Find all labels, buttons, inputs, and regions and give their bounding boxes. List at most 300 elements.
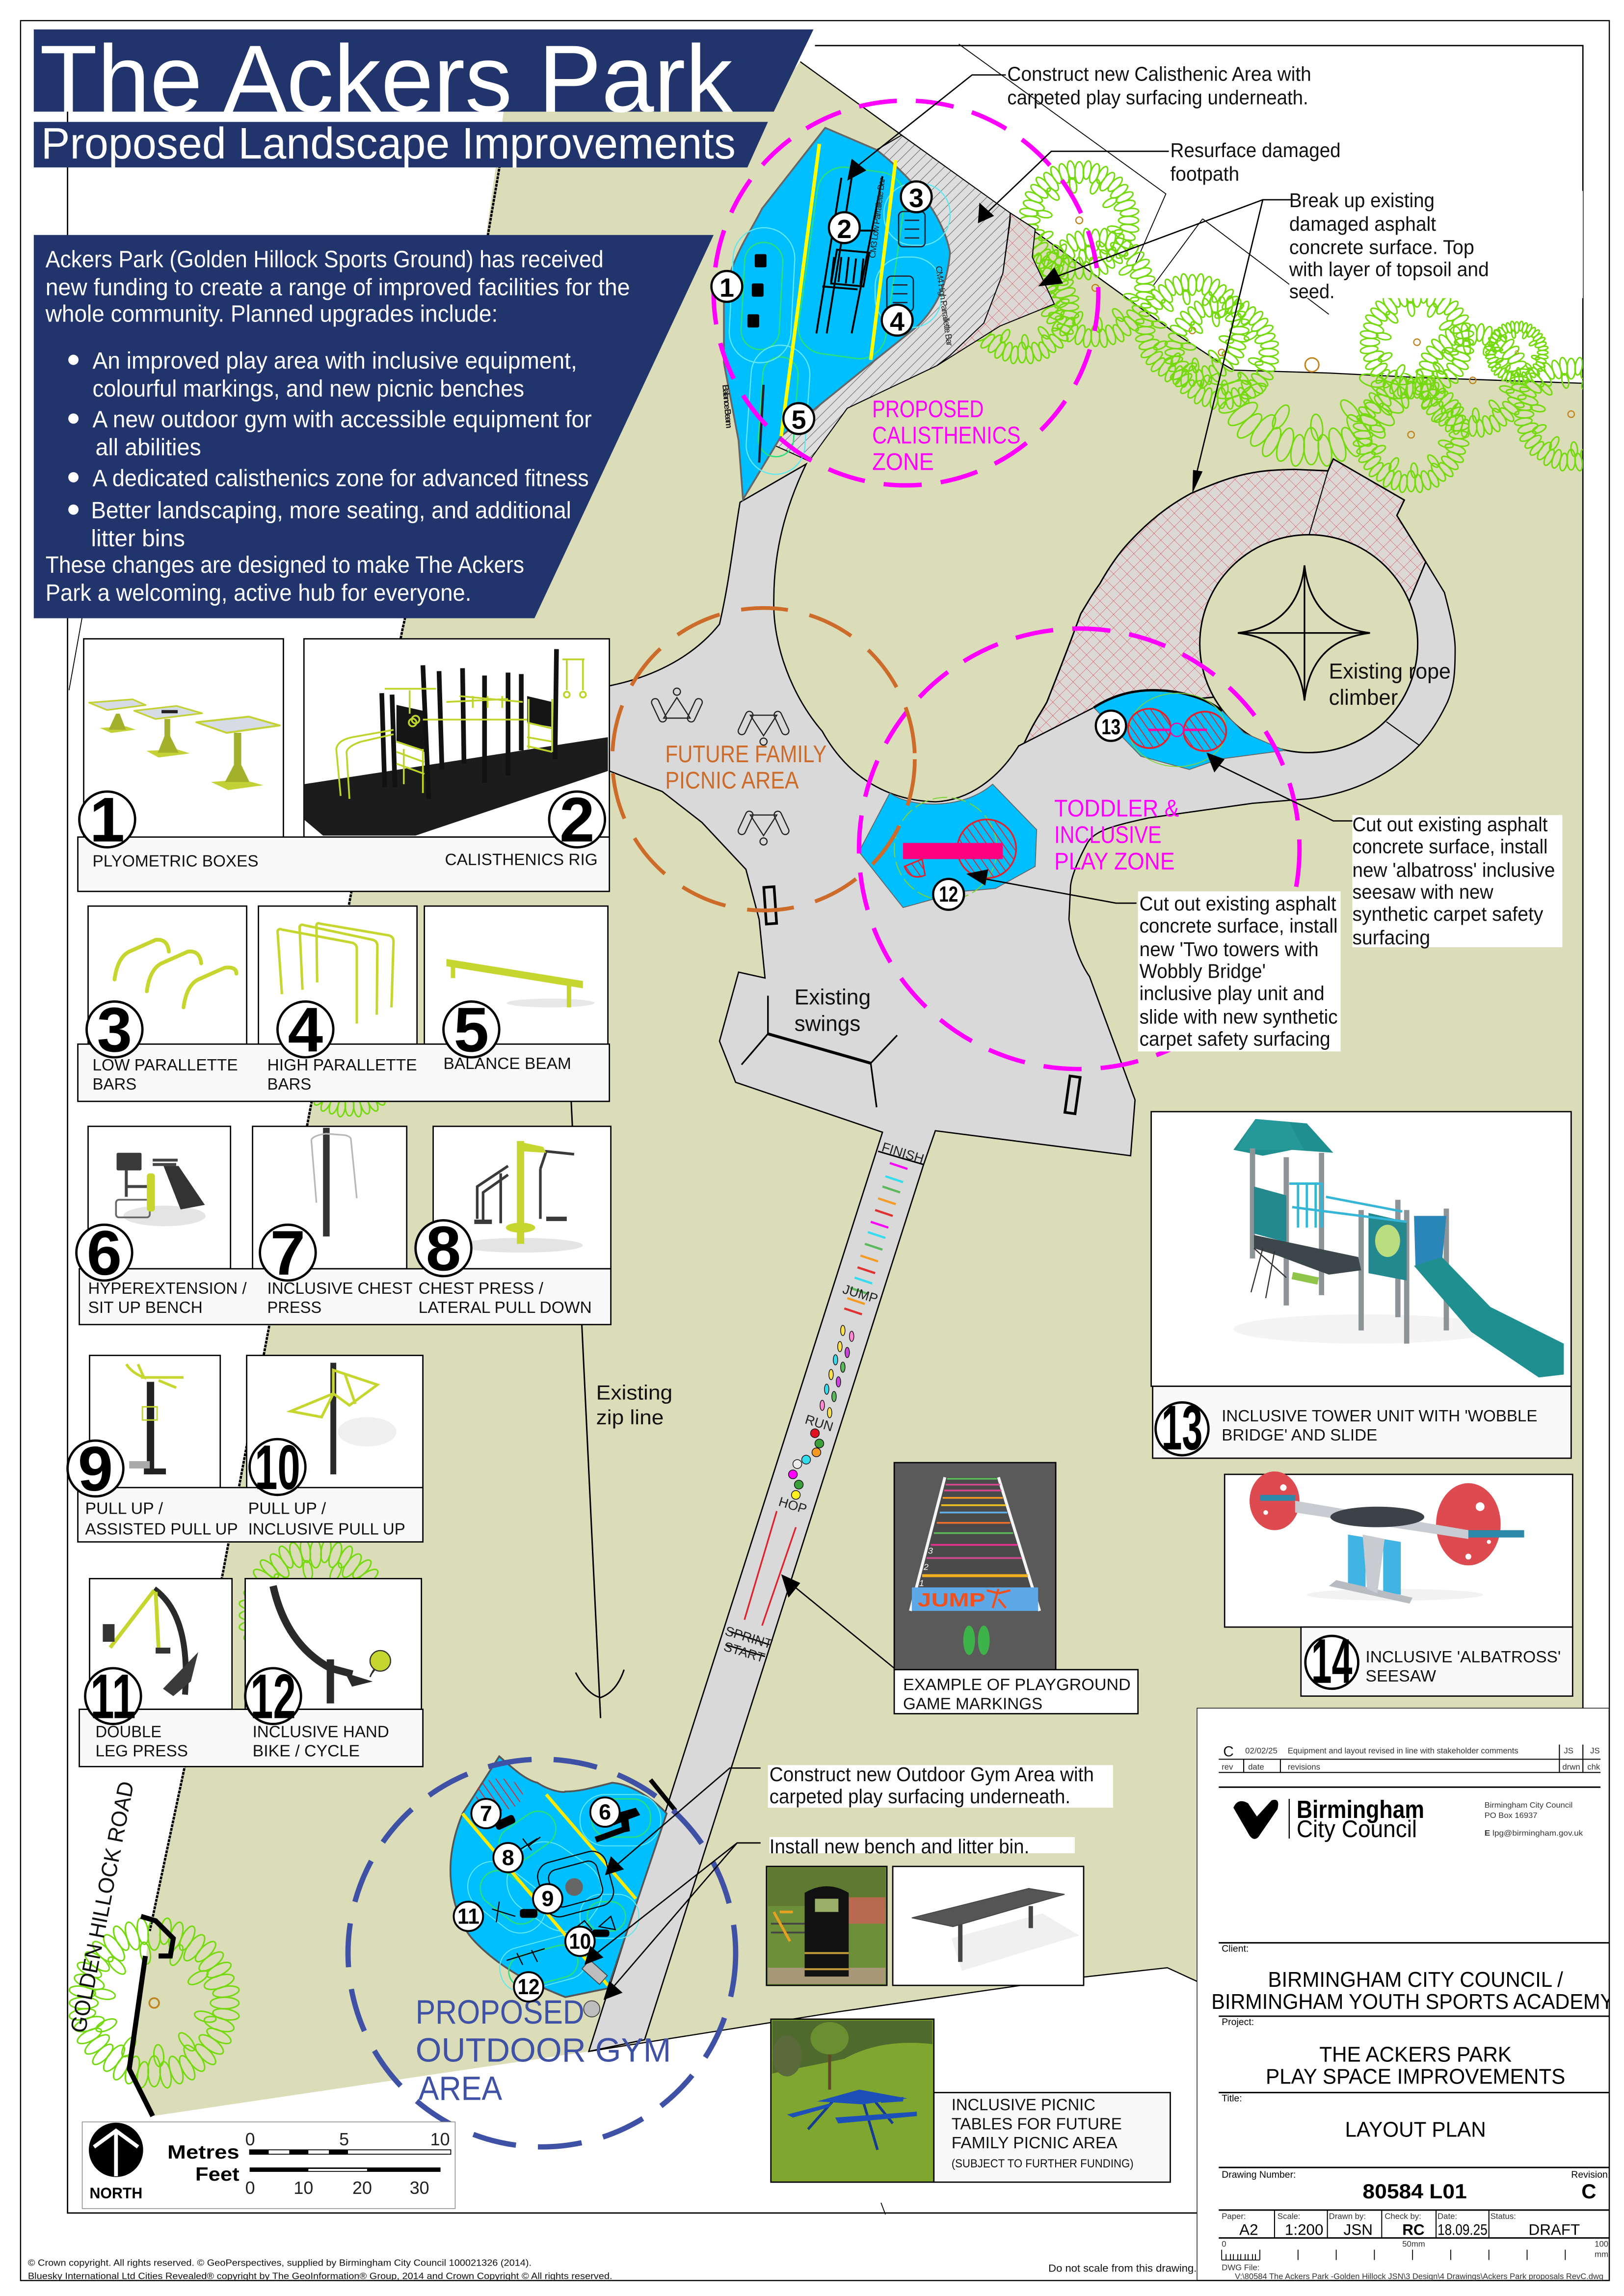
zone circle: outdoor gym: [348, 1759, 736, 2147]
number badge 7: [260, 1218, 316, 1288]
gym equipment plan symbols: [494, 1808, 640, 1937]
equipment small labels: CM4 High Parrallette Bar: [934, 265, 955, 347]
drawing file path: [1222, 2265, 1603, 2280]
scale bar: metres and feet: 10: [293, 2178, 313, 2198]
map number markers: calisthenics: 1: [719, 273, 734, 302]
icon: calisthenics rig plan: [816, 176, 882, 333]
toddler play surfacing 12: [859, 784, 1037, 908]
big tree trunk marker: [1305, 358, 1319, 372]
drawing data cells: Drawn by:: [1329, 2212, 1366, 2221]
callout: albatross seesaw: new 'albatross' inclusive: [1353, 858, 1555, 881]
caption: picnic tables: [934, 2093, 1171, 2182]
caption: picnic tables: TABLES FOR FUTURE: [952, 2114, 1122, 2133]
image: playground game markings: 1: [919, 1578, 924, 1588]
map number markers: gym: 8: [502, 1845, 514, 1870]
track labels: [722, 1140, 926, 1665]
scale bar: metres and feet: 20: [352, 2178, 372, 2198]
label: existing swings: Existing: [795, 985, 871, 1010]
caption: equipment 3 to 5: [78, 1044, 610, 1101]
client details: Drawing Number:: [1222, 2169, 1296, 2180]
drawing file path: DWG File:: [1222, 2263, 1259, 2272]
map number markers: calisthenics: 5: [792, 405, 806, 435]
callout: calisthenic area: [1007, 63, 1311, 109]
revision table: rev: [1222, 1762, 1233, 1771]
icon: rope climber: [1238, 565, 1370, 700]
caption: equipment 11 and 12: LEG PRESS: [95, 1741, 188, 1760]
revision table: drwn: [1562, 1762, 1580, 1771]
arrowheads: [585, 159, 1225, 2000]
number badge 4: [277, 995, 333, 1065]
caption: inclusive seesaw: SEESAW: [1365, 1667, 1436, 1685]
label: existing rope climber: climber: [1329, 685, 1398, 710]
road name: GOLDEN HILLOCK ROAD: [65, 1779, 139, 2035]
callout: two towers play unit: new 'Two towers with: [1140, 938, 1319, 961]
callout: two towers play unit: Cut out existing asphalt: [1140, 892, 1336, 915]
image: calisthenics rig: [304, 639, 610, 837]
caption: equipment 6 to 8: INCLUSIVE CHEST: [267, 1279, 413, 1297]
callout: two towers play unit: slide with new synthetic: [1140, 1005, 1338, 1028]
picnic table symbols: [650, 688, 790, 845]
map number markers: gym: 10: [569, 1928, 591, 1953]
caption: equipment 9 and 10: ASSISTED PULL UP: [85, 1520, 238, 1538]
image: high parallette bars: [259, 906, 417, 1044]
equipment small labels: Balance Beam: [720, 384, 734, 429]
icon: parallette bars plan: [887, 212, 925, 311]
number badge 13: [1156, 1393, 1208, 1463]
track labels: START: [722, 1639, 767, 1665]
logo: Birmingham City Council: City Council: [1297, 1815, 1417, 1842]
scale bar: metres and feet: 30: [410, 2178, 429, 2198]
ruler: mm: [1595, 2250, 1608, 2259]
map number markers: gym: [453, 1797, 620, 2002]
scale bar: metres and feet: Feet: [195, 2164, 240, 2185]
panel: introduction text: A new outdoor gym with accessible equipment for: [92, 407, 592, 433]
callout: break up surface: concrete surface. Top: [1289, 236, 1474, 259]
title block: [1197, 1708, 1614, 2281]
number badge 5: 5: [454, 995, 489, 1065]
number badge 6: 6: [87, 1218, 122, 1288]
footprints: [820, 1325, 854, 1418]
number badge 6: [77, 1218, 132, 1288]
new bench on gym area: [650, 1780, 675, 1811]
icon: seesaw plan: [1128, 709, 1171, 748]
drawing data cells: Date:: [1438, 2212, 1457, 2221]
callout: resurface footpath: [1171, 139, 1341, 185]
panel: introduction text: Park a welcoming, active hub for everyone.: [46, 580, 471, 606]
callout: calisthenic area: carpeted play surfacing underneath.: [1007, 86, 1308, 109]
panel: equipment 3 to 5: [78, 906, 610, 1101]
revision table: date: [1248, 1762, 1264, 1771]
image: playground game markings: 3: [928, 1546, 933, 1556]
zone label: picnic: [665, 741, 826, 794]
panel: introduction text: A dedicated calisthenics zone for advanced fitness: [92, 465, 589, 491]
image: double leg press: [90, 1578, 232, 1709]
client details: 80584 L01: [1362, 2180, 1467, 2203]
callout: break up surface: seed.: [1289, 280, 1335, 302]
callout: albatross seesaw: [1353, 813, 1562, 949]
ruler: 100: [1595, 2240, 1608, 2249]
gym yellow bay lines: [462, 1794, 636, 1985]
caption: equipment 1 and 2: [78, 837, 610, 891]
image: low parallette bars: [88, 906, 247, 1044]
hop circles: [789, 1429, 824, 1499]
drawing data cells: JSN: [1344, 2221, 1373, 2239]
panel: introduction text: These changes are designed to make The Ackers: [46, 552, 524, 578]
calisthenics zone surfacing: [720, 128, 1054, 499]
revision table: Equipment and layout revised in line with stakeholder comments: [1288, 1746, 1518, 1755]
track labels: FINISH: [880, 1140, 926, 1166]
drawing data cells: Paper:: [1222, 2212, 1246, 2221]
outdoor gym surfacing: [451, 1756, 675, 2017]
seesaw surfacing 13: [1094, 690, 1285, 770]
label: existing zip line: Existing: [596, 1381, 672, 1404]
caption: equipment 11 and 12: INCLUSIVE HAND: [253, 1722, 389, 1740]
image: albatross seesaw: [1225, 1471, 1572, 1627]
image: litter bin photo: [767, 1867, 887, 1985]
number badge 11: 11: [90, 1662, 136, 1732]
number badge 5: [444, 995, 499, 1065]
zone label: toddler: [1054, 795, 1179, 875]
number badge 2: 2: [559, 785, 595, 855]
client details: Project:: [1222, 2017, 1254, 2028]
callout: break up surface: Break up existing: [1289, 189, 1435, 212]
callout arrows: [593, 75, 1355, 1990]
callout: albatross seesaw: synthetic carpet safety: [1353, 903, 1544, 925]
number badge 1: 1: [90, 785, 125, 855]
panel: game markings example: [894, 1463, 1138, 1714]
callout: break up surface: [1289, 189, 1489, 302]
caption: inclusive seesaw: [1301, 1627, 1572, 1696]
existing swings frame: [742, 996, 897, 1107]
sprint lanes: [745, 1511, 796, 1626]
copyright notes: Bluesky International Ltd Cities Revealed® copyright by The GeoInformation® Group, 2014 and Crown Copyright © All rights reserved.: [28, 2270, 612, 2281]
number badge 4: 4: [288, 995, 323, 1065]
number badge 10: 10: [255, 1433, 300, 1503]
caption: equipment 9 and 10: PULL UP /: [85, 1499, 163, 1518]
caption: equipment 6 to 8: CHEST PRESS /: [419, 1279, 544, 1297]
zone circle: picnic area: [612, 608, 915, 910]
balance beam plan: [759, 385, 764, 463]
council address: Birmingham City Council: [1485, 1801, 1572, 1810]
drawing data cells: A2: [1239, 2221, 1258, 2239]
image: pull up inclusive: [247, 1356, 423, 1489]
zone label: calisthenics: [872, 396, 1020, 476]
label: existing swings: [795, 985, 871, 1036]
drawing data cells: 18.09.25: [1438, 2221, 1488, 2239]
main footpath and sprint track: [589, 464, 1455, 2052]
icon: plyometric boxes: [747, 254, 767, 327]
map number markers: play: 13: [1101, 714, 1120, 739]
scale bar: metres and feet: [167, 2130, 451, 2198]
callout: calisthenic area: Construct new Calisthenic Area with: [1007, 63, 1311, 85]
caption: inclusive tower unit: BRIDGE' AND SLIDE: [1222, 1426, 1377, 1444]
map number markers: play: [933, 711, 1126, 910]
map number markers: calisthenics: 4: [890, 307, 905, 336]
zone label: picnic: PICNIC AREA: [665, 767, 799, 794]
number badge 3: 3: [97, 995, 132, 1065]
panel: introduction text: all abilities: [95, 435, 201, 461]
caption: equipment 9 and 10: INCLUSIVE PULL UP: [248, 1520, 405, 1538]
number badge 10: [250, 1433, 305, 1503]
client details: BIRMINGHAM CITY COUNCIL /: [1268, 1968, 1564, 1992]
zone label: outdoor gym: OUTDOOR GYM: [416, 2031, 671, 2069]
scale bar: metres and feet: Metres: [167, 2142, 240, 2163]
track labels: RUN: [803, 1412, 835, 1434]
image: pull up assisted: [90, 1356, 220, 1488]
ruler: [1222, 2240, 1608, 2260]
revision table: chk: [1587, 1762, 1600, 1771]
equipment small labels: CM3 Low Parrallette Bar: [867, 177, 887, 259]
client details: PLAY SPACE IMPROVEMENTS: [1266, 2065, 1565, 2089]
map number markers: calisthenics: 2: [837, 214, 852, 244]
copyright notes: [28, 2258, 612, 2281]
title banner: The Ackers Park: [40, 26, 733, 132]
icon: play tower plan: [958, 820, 1016, 878]
number badge 14: 14: [1311, 1627, 1353, 1697]
drawing data cells: Scale:: [1278, 2212, 1300, 2221]
label: existing rope climber: Existing rope: [1329, 658, 1451, 683]
number badge 3: [87, 995, 142, 1065]
image: playground game markings: [894, 1463, 1056, 1670]
number badge 13: 13: [1162, 1393, 1202, 1463]
number badge 12: [245, 1662, 301, 1732]
caption: equipment 3 to 5: HIGH PARALLETTE: [267, 1056, 417, 1074]
scale note: Do not scale from this drawing.: [1048, 2263, 1197, 2274]
image: chest press lateral pull: [433, 1126, 611, 1269]
caption: game markings: [894, 1670, 1138, 1714]
caption: equipment 1 and 2: PLYOMETRIC BOXES: [92, 852, 259, 870]
caption: game markings: GAME MARKINGS: [903, 1695, 1042, 1713]
caption: equipment 3 to 5: BARS: [92, 1075, 136, 1093]
logo: Birmingham City Council: Birmingham: [1297, 1795, 1424, 1823]
revision table: [1219, 1743, 1600, 1787]
caption: picnic tables: FAMILY PICNIC AREA: [952, 2134, 1118, 2152]
label: existing zip line: [596, 1381, 672, 1429]
caption: inclusive tower unit: INCLUSIVE TOWER UNIT WITH 'WOBBLE: [1222, 1407, 1537, 1425]
panel: equipment 9 and 10: [68, 1356, 423, 1542]
callout: break up surface: with layer of topsoil and: [1289, 258, 1489, 281]
callout: albatross seesaw: surfacing: [1353, 926, 1430, 949]
track labels: HOP: [777, 1494, 809, 1517]
callout: two towers play unit: inclusive play unit and: [1140, 982, 1325, 1005]
image: balance beam: [425, 906, 608, 1044]
caption: equipment 6 to 8: SIT UP BENCH: [88, 1298, 203, 1316]
number badge 8: 8: [426, 1214, 461, 1284]
caption: inclusive seesaw: INCLUSIVE 'ALBATROSS': [1365, 1648, 1561, 1666]
callout: outdoor gym area: Construct new Outdoor Gym Area with: [770, 1763, 1094, 1786]
panel: introduction text: Better landscaping, more seating, and additional: [91, 498, 571, 524]
callout: resurface footpath: Resurface damaged: [1171, 139, 1341, 161]
panel: introduction text: whole community. Planned upgrades include:: [45, 301, 498, 327]
number badge 12: 12: [250, 1662, 296, 1732]
scale bar: metres and feet: 0: [245, 2130, 255, 2149]
council address: E lpg@birmingham.gov.uk: [1485, 1829, 1583, 1838]
panel: introduction text: new funding to create a range of improved facilities for the: [46, 274, 630, 300]
map number markers: play: 12: [939, 881, 958, 907]
revision table: C: [1223, 1743, 1234, 1760]
map number markers: gym: 7: [480, 1801, 492, 1826]
zone label: calisthenics: ZONE: [872, 449, 934, 476]
icon: north arrow: NORTH: [90, 2185, 142, 2202]
callout: two towers play unit: concrete surface, install: [1140, 914, 1338, 937]
panel: inclusive tower unit: [1151, 1112, 1571, 1463]
equipment small labels: [720, 177, 955, 429]
client details: BIRMINGHAM YOUTH SPORTS ACADEMY: [1211, 1990, 1614, 2014]
number badge 8: [416, 1214, 471, 1284]
caption: equipment 3 to 5: BARS: [267, 1075, 311, 1093]
image: playground game markings: 2: [923, 1562, 929, 1572]
drawing data cells: Check by:: [1384, 2212, 1421, 2221]
client details: THE ACKERS PARK: [1319, 2043, 1512, 2067]
number badge 14: [1305, 1627, 1358, 1697]
panel: introduction text: Ackers Park (Golden Hillock Sports Ground) has received: [46, 247, 604, 273]
client details: C: [1581, 2180, 1596, 2203]
jump bars: [844, 1163, 907, 1314]
zone label: toddler: TODDLER &: [1054, 795, 1179, 822]
drawing data cells: 1:200: [1285, 2221, 1323, 2239]
zone label: calisthenics: CALISTHENICS: [872, 422, 1020, 449]
callout: albatross seesaw: Cut out existing asphalt: [1353, 813, 1547, 836]
callout: bench and litter bin: Install new bench and litter bin.: [770, 1835, 1029, 1858]
client details: Title:: [1222, 2093, 1242, 2104]
client details: LAYOUT PLAN: [1345, 2118, 1486, 2141]
client details: [1211, 1943, 1614, 2238]
image: picnic table photo: [771, 2019, 934, 2182]
panel: equipment 11 and 12: [80, 1578, 423, 1766]
map number markers: gym: 11: [457, 1903, 479, 1928]
image: plyometric boxes: [84, 639, 283, 838]
callout: albatross seesaw: concrete surface, install: [1353, 835, 1547, 857]
callout: albatross seesaw: seesaw with new: [1353, 881, 1494, 903]
panel: introduction text: colourful markings, and new picnic benches: [92, 376, 524, 402]
surfacing zones: [740, 164, 908, 458]
zone circle: calisthenics: [714, 101, 1098, 485]
callout: resurface footpath: footpath: [1171, 162, 1239, 185]
subtitle banner: Proposed Landscape Improvements: [41, 119, 736, 168]
drawing data cells: DRAFT: [1529, 2221, 1580, 2239]
label: existing zip line: zip line: [596, 1406, 664, 1429]
white box behind topsoil note: [1289, 191, 1583, 298]
ruler: 50mm: [1402, 2240, 1425, 2249]
revision table: 02/02/25: [1245, 1746, 1278, 1755]
zone label: toddler: PLAY ZONE: [1054, 848, 1174, 875]
caption: picnic tables: INCLUSIVE PICNIC: [952, 2095, 1095, 2113]
number badge 9: [68, 1434, 123, 1504]
number badge 1: [80, 785, 135, 855]
inner lawn of rope climber: [1200, 534, 1418, 752]
council address: [1485, 1801, 1583, 1838]
panel: introduction text: An improved play area with inclusive equipment,: [92, 348, 577, 374]
image: new bench: [893, 1867, 1084, 1985]
panel: north arrow and scale bar: [82, 2122, 455, 2209]
yellow bay lines: [781, 144, 896, 436]
zone label: calisthenics: PROPOSED: [872, 396, 984, 423]
revision table: revisions: [1288, 1762, 1320, 1771]
caption: equipment 9 and 10: PULL UP /: [248, 1499, 326, 1518]
copyright notes: © Crown copyright. All rights reserved. © GeoPerspectives, supplied by Birmingham City Council 100021326 (2014).: [28, 2258, 532, 2268]
callout: two towers play unit: carpet safety surfacing: [1140, 1027, 1331, 1050]
icon: north arrow: [89, 2123, 143, 2202]
drawing data cells: RC: [1402, 2221, 1425, 2239]
image: hyperextension bench: [88, 1126, 231, 1269]
caption: equipment 6 to 8: [80, 1269, 611, 1325]
label: existing swings: swings: [795, 1011, 860, 1036]
track labels: SPRINT: [723, 1624, 774, 1652]
map number markers: gym: 6: [599, 1799, 611, 1824]
caption: equipment 6 to 8: LATERAL PULL DOWN: [419, 1298, 592, 1316]
map number markers: gym: 9: [541, 1886, 554, 1911]
caption: picnic tables: (SUBJECT TO FURTHER FUNDING): [952, 2157, 1134, 2170]
callout: outdoor gym area: [768, 1763, 1113, 1808]
map number markers: gym: 12: [518, 1974, 540, 1999]
panel: inclusive picnic tables: [771, 2019, 1171, 2182]
caption: equipment 3 to 5: LOW PARALLETTE: [92, 1056, 238, 1074]
label: existing rope climber: [1329, 658, 1451, 710]
track labels: JUMP: [841, 1281, 879, 1306]
scale bar: metres and feet: 5: [339, 2130, 349, 2149]
litter bins on path: [764, 887, 1080, 1114]
image: inclusive chest press: [253, 1126, 407, 1269]
gym red zone: [476, 1778, 523, 1811]
caption: equipment 11 and 12: DOUBLE: [95, 1722, 161, 1740]
scale bar: metres and feet: 10: [430, 2130, 450, 2149]
ruler: 0: [1222, 2240, 1226, 2249]
damaged surface crosshatch ring: [1015, 459, 1426, 761]
council address: PO Box 16937: [1485, 1812, 1537, 1820]
number badge 7: 7: [270, 1218, 305, 1288]
caption: equipment 3 to 5: BALANCE BEAM: [444, 1054, 571, 1072]
zone label: outdoor gym: PROPOSED: [416, 1993, 585, 2031]
sprint track markings: [722, 1140, 926, 1665]
drawing file path: V:\80584 The Ackers Park -Golden Hillock JSN\3 Design\4 Drawings\Ackers Park proposals RevC.dwg: [1235, 2271, 1603, 2281]
drawing data cells: Status:: [1491, 2212, 1516, 2221]
caption: equipment 11 and 12: BIKE / CYCLE: [253, 1741, 360, 1760]
revision table: JS: [1590, 1746, 1600, 1755]
callout: outdoor gym area: carpeted play surfacing underneath.: [770, 1785, 1070, 1808]
number badge 2: [549, 785, 605, 855]
zone circle: toddler and inclusive play: [859, 629, 1300, 1069]
scale bar: metres and feet: 0: [245, 2178, 255, 2198]
image: inclusive hand bike: [245, 1578, 422, 1709]
callout: two towers play unit: Wobbly Bridge': [1140, 960, 1266, 983]
number badge 9: 9: [78, 1434, 113, 1504]
client details: Client:: [1222, 1943, 1249, 1954]
zone label: outdoor gym: [416, 1993, 671, 2107]
caption: equipment 11 and 12: [80, 1709, 423, 1766]
panel: equipment 1 and 2: [78, 639, 610, 891]
caption: equipment 9 and 10: [78, 1488, 423, 1542]
zone label: toddler: INCLUSIVE: [1054, 821, 1162, 848]
gray bench and bin symbols: [582, 1960, 607, 2017]
caption: inclusive tower unit: [1153, 1386, 1571, 1458]
image: play tower with slide: [1151, 1112, 1571, 1386]
revision table: JS: [1564, 1746, 1573, 1755]
panel: introduction text: litter bins: [91, 526, 185, 552]
map number markers: calisthenics: 3: [909, 184, 924, 213]
map number markers: calisthenics: [712, 182, 932, 435]
panel: introduction text: [34, 235, 714, 618]
zip line with fork arrow: [571, 1101, 624, 1718]
client details: Revision:: [1571, 2169, 1610, 2180]
logo: Birmingham City Council: [1233, 1795, 1424, 1842]
road edge: [129, 1916, 173, 2116]
caption: equipment 6 to 8: HYPEREXTENSION /: [88, 1279, 247, 1297]
image: playground game markings: JUMP: [918, 1590, 985, 1611]
drawing data cells: [1222, 2210, 1580, 2239]
panel: inclusive seesaw: [1225, 1471, 1572, 1697]
caption: equipment 6 to 8: PRESS: [267, 1298, 321, 1316]
caption: equipment 1 and 2: CALISTHENICS RIG: [445, 850, 598, 868]
